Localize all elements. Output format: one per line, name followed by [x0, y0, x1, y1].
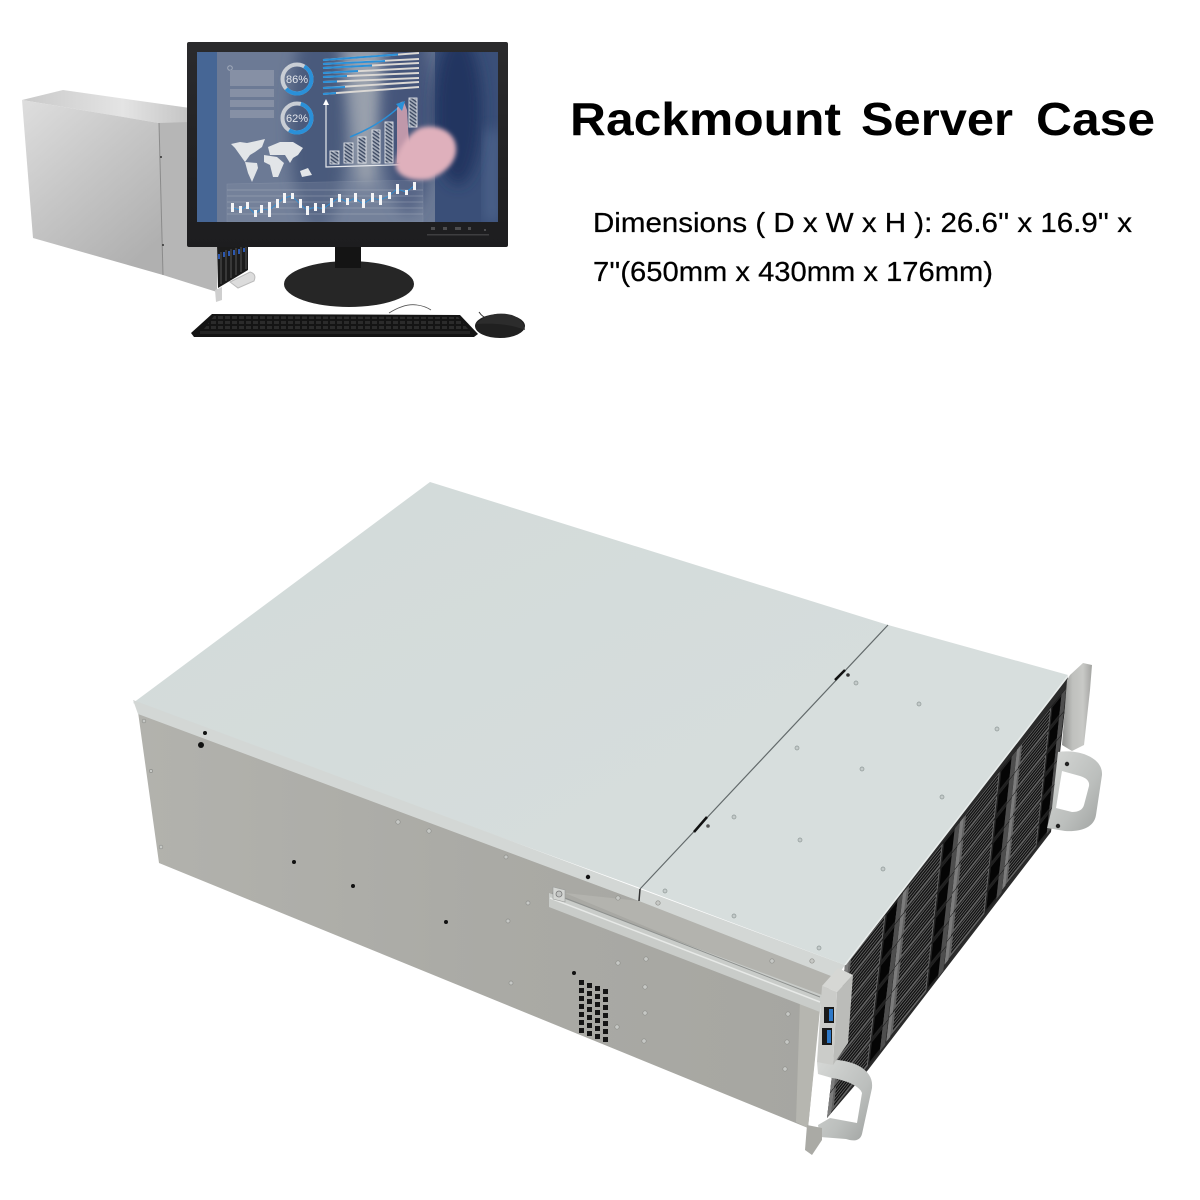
candlestick chart on screen	[227, 180, 423, 222]
bar chart on screen	[323, 98, 423, 167]
side panel holes	[198, 731, 590, 975]
title: Server	[861, 93, 1013, 145]
main product photo: rackmount server case	[133, 482, 1102, 1155]
side vent	[579, 980, 608, 1042]
dimensions text: 7''(650mm x 430mm x 176mm)	[593, 256, 993, 287]
right rack ear and handle	[1047, 663, 1102, 831]
progress lines on screen	[323, 53, 419, 94]
top flange	[133, 700, 845, 978]
donut 86%	[280, 62, 314, 96]
top cover screws	[663, 681, 999, 950]
lighter front section of side panel	[565, 893, 836, 1000]
donut 62%: 62%	[286, 113, 308, 125]
title: Rackmount	[570, 93, 841, 145]
keyboard	[191, 305, 478, 337]
USB ports	[822, 1007, 834, 1045]
mouse	[475, 312, 525, 338]
small product photo: desktop setup with tower case	[22, 15, 525, 338]
text lines on screen	[228, 66, 274, 118]
monitor	[187, 42, 508, 247]
world map on screen	[231, 139, 312, 182]
donut 86%: 86%	[286, 74, 308, 86]
monitor control buttons	[427, 227, 489, 236]
left rack ear with USB ports	[817, 968, 853, 1065]
title	[570, 93, 1155, 145]
dimensions text: Dimensions ( D x W x H ): 26.6'' x 16.9'' x	[593, 207, 1132, 238]
hand touching screen	[396, 101, 456, 180]
donut 62%	[280, 102, 314, 134]
title: Case	[1036, 93, 1155, 145]
dimensions text	[593, 207, 1132, 287]
side rail	[549, 887, 822, 1012]
rear top cover	[640, 625, 1068, 965]
side panel	[138, 712, 836, 1128]
drive bays front face	[827, 676, 1068, 1118]
tower case	[22, 90, 255, 302]
seam between covers	[640, 625, 888, 889]
front handle	[805, 1060, 872, 1155]
side panel screws	[142, 719, 814, 1071]
monitor stand and base	[284, 240, 414, 307]
top cover	[133, 482, 888, 888]
